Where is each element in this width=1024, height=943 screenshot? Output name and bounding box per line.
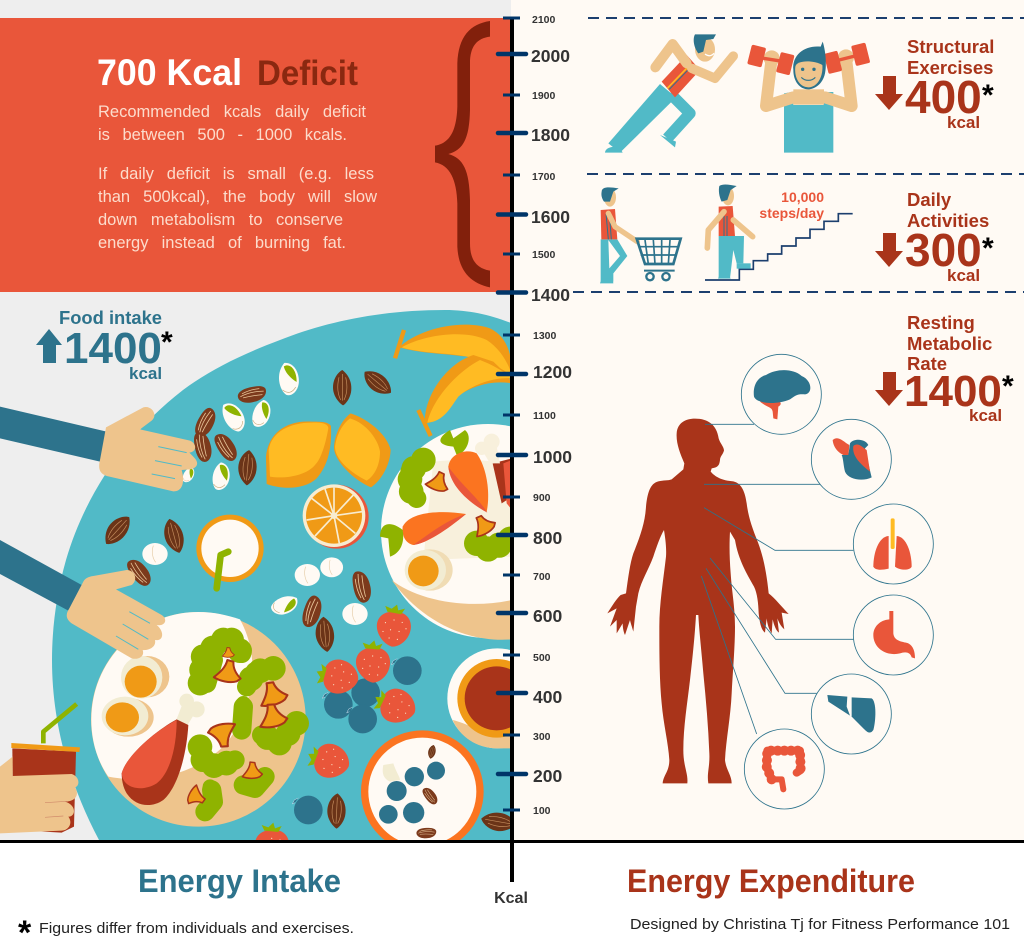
body silhouette [607,419,789,783]
icon: eggs [102,656,169,737]
icon: cup held in hand [0,704,80,833]
kcal axis: 1900 [532,90,556,102]
upper food group [0,325,595,640]
icon: drink glass [196,515,264,582]
daily activities stat: 300 [905,224,982,276]
section heading: energy intake: Energy Intake [138,863,341,899]
structural exercises stat: Structural [907,36,994,57]
food intake value: 1400 [64,324,162,373]
icon: chicken leg [122,694,205,805]
resting metabolic rate stat: * [1002,370,1014,403]
kcal axis: 1400 [531,285,570,305]
resting metabolic rate stat: Resting [907,312,975,333]
kcal axis: 700 [533,571,551,583]
footnote: Figures differ from individuals and exercises. [39,920,354,937]
deficit heading: 700 Kcal [97,52,242,93]
icon: berries and nuts [123,556,518,865]
illustration: weightlifter [747,42,870,153]
resting metabolic rate stat: Rate [907,353,947,374]
lower food group [0,540,547,865]
panel: energy intake background [0,0,511,840]
asterisk: * [161,326,173,359]
icon: green straw [217,552,228,588]
icon: broccoli [200,640,297,814]
kcal axis: 200 [533,766,562,786]
food intake heading: Food intake [59,308,162,328]
panel: energy expenditure background [511,0,1024,840]
daily activities stat: kcal [947,266,980,285]
kcal axis: 300 [533,731,551,743]
curly bracket [435,21,490,287]
kcal axis [498,14,572,882]
resting metabolic rate stat [875,312,1014,425]
resting metabolic rate stat: 1400 [904,367,1002,416]
deficit description text: Recommended kcals daily deficit [98,103,366,121]
icon: right plate [381,424,510,640]
kcal axis: 2000 [531,46,570,66]
icon: heart [811,419,891,499]
kcal axis: 1600 [531,207,570,227]
icon: main plate [91,612,306,827]
kcal axis: 1200 [533,362,572,382]
deficit description text: down metabolism to conserve [98,211,343,229]
icon: lower hand with sleeve [0,540,165,659]
dashed divider lines [573,18,1024,292]
icon: salad on right plate [380,430,512,557]
icon: nuts group [99,362,396,565]
human body with organs [607,354,933,809]
structural exercises stat [875,36,994,132]
icon: bananas [395,325,512,436]
kcal axis: 600 [533,606,562,626]
deficit description text: energy instead of burning fat. [98,234,346,252]
daily activities stat [875,189,994,285]
kcal axis: 1100 [533,410,556,422]
leader lines [701,424,853,734]
daily activities stat: * [982,232,994,265]
icon: lemons [266,413,391,488]
icon: upper hand with sleeve [0,407,197,491]
deficit description text [98,103,378,252]
kcal axis: 1700 [532,171,556,183]
structural exercises stat: * [982,79,994,112]
deficit description text: is between 500 - 1000 kcals. [98,126,347,144]
section heading: energy expenditure: Energy Expenditure [627,863,915,899]
kcal axis: 500 [533,652,551,664]
kcal axis: 1000 [533,447,572,467]
baseline [0,840,1024,843]
kcal axis: 900 [533,492,551,504]
icon: intestines [744,729,824,809]
kcal axis: 800 [533,528,562,548]
daily activities stat: Daily [907,189,952,210]
steps per day label second line: steps/day [759,205,824,221]
icon: liver [811,674,891,754]
icon: stomach [853,595,933,675]
icon: bowl of blueberries and nuts [365,734,480,849]
icon: up arrow [36,329,62,363]
daily activities stat: Activities [907,210,989,231]
illustration: shopper with cart [600,187,681,283]
steps per day label: 10,000 [781,189,824,205]
kcal axis: 100 [533,805,551,817]
kcal axis: 2100 [532,14,556,26]
kcal axis: 1500 [532,249,556,261]
credit: Designed by Christina Tj for Fitness Performance 101 [630,916,1010,933]
icon: orange slice [303,484,369,549]
icon: mushrooms [185,648,289,810]
food intake label [36,308,173,383]
deficit description text: than 500kcal), the body will slow [98,188,377,206]
deficit heading [97,52,358,93]
illustration: stair climber [705,185,853,280]
icon: egg on right plate [405,549,453,591]
kcal axis: 400 [533,687,562,707]
structural exercises stat: 400 [905,71,982,123]
structural exercises stat: Exercises [907,57,993,78]
kcal unit: kcal [129,364,162,383]
structural exercises stat: kcal [947,113,980,132]
icon: lungs [853,504,933,584]
icon: tea cup plate [447,648,510,748]
deficit description text: If daily deficit is small (e.g. less [98,165,374,183]
illustration: runner [605,34,733,153]
kcal axis: 1800 [531,125,570,145]
deficit heading: Deficit [257,54,358,93]
kcal axis: 1300 [533,330,557,342]
resting metabolic rate stat: Metabolic [907,333,992,354]
panel: deficit panel [0,18,511,292]
teal round table [52,310,511,840]
food illustration: table with plates and food [0,310,510,840]
resting metabolic rate stat: kcal [969,406,1002,425]
axis unit label: Kcal [494,890,528,907]
icon: brain [741,354,821,434]
